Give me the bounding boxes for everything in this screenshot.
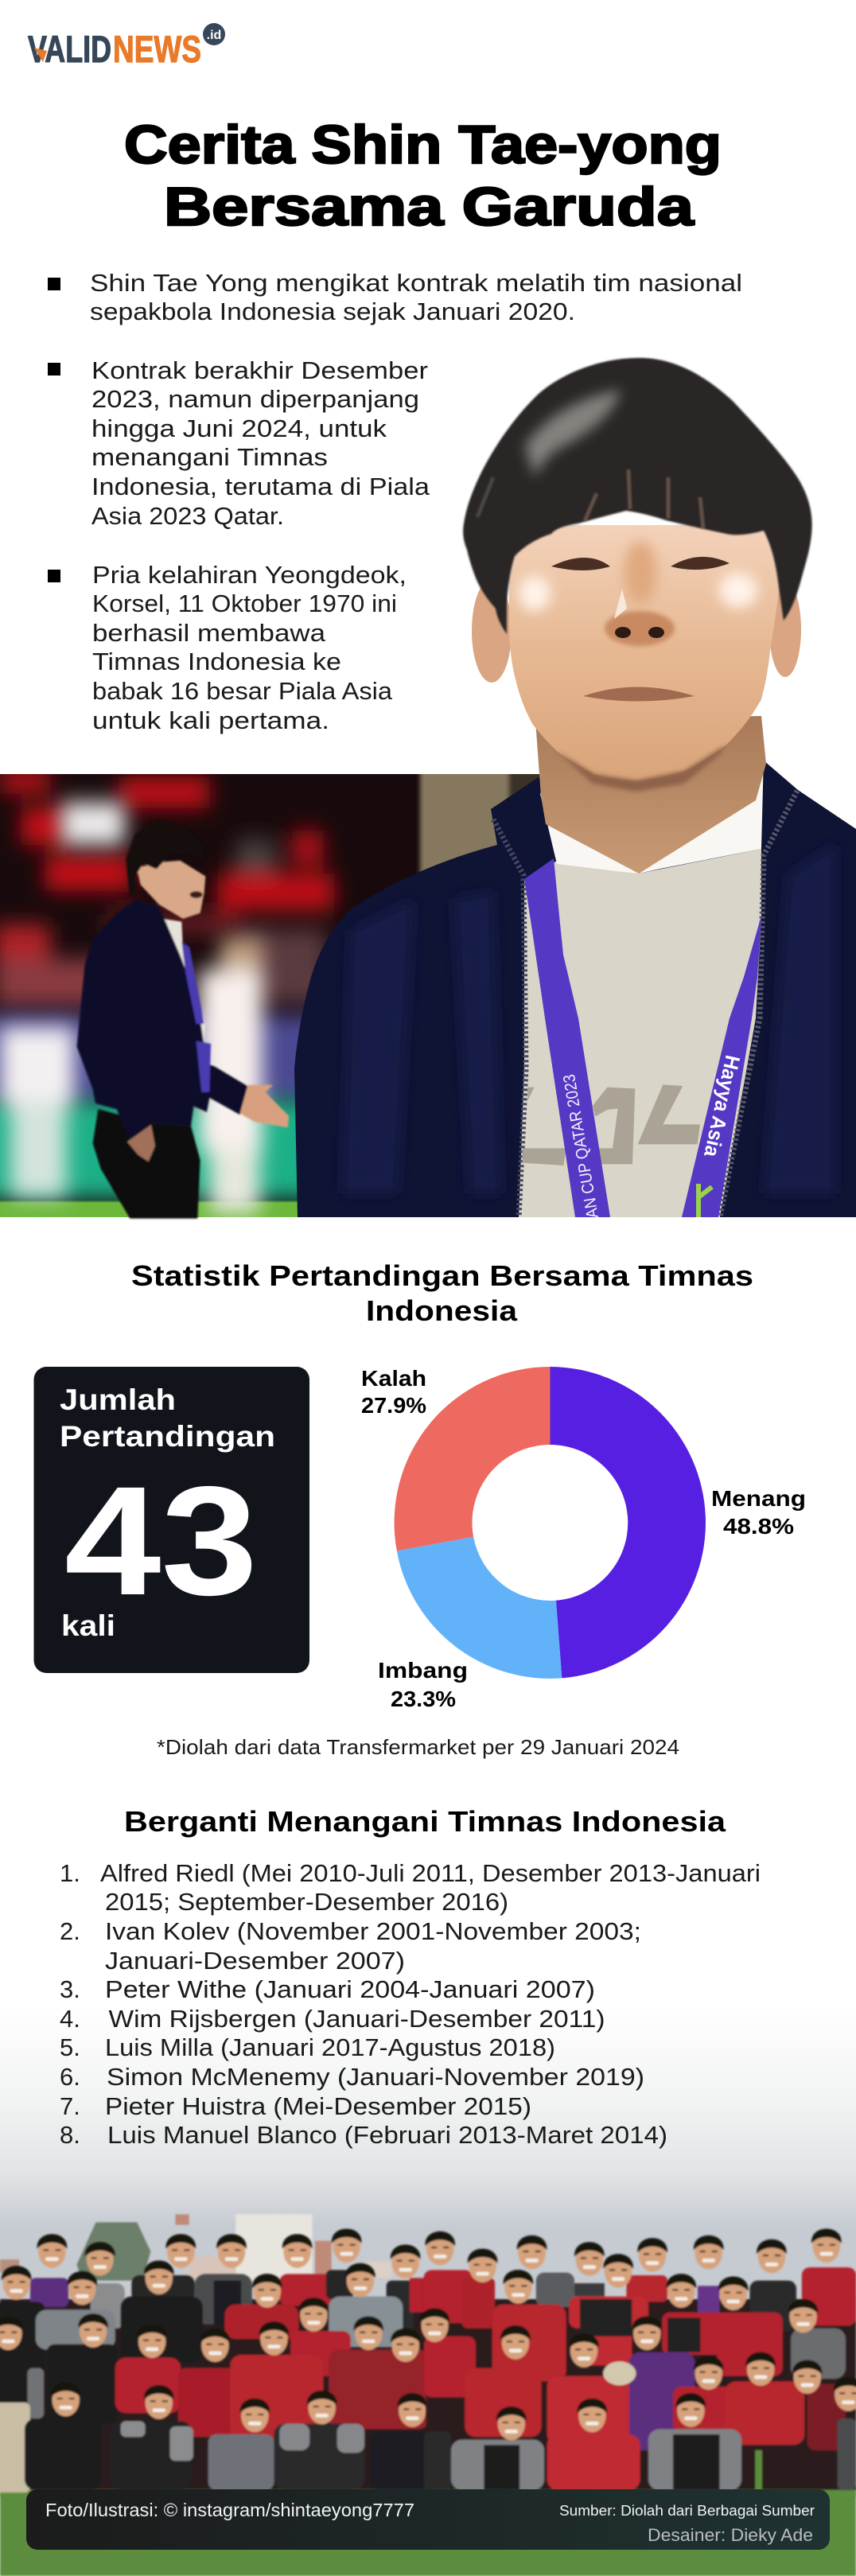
shirt emblem <box>523 1084 700 1165</box>
text block: third bullet <box>48 561 407 734</box>
shirt <box>163 919 205 1053</box>
heads <box>37 2234 67 2268</box>
numbered list of coaches: 2. <box>60 1917 80 1945</box>
label: imbang: 23.3% <box>391 1687 456 1711</box>
grass <box>0 2486 856 2576</box>
text block: third bullet: babak 16 besar Piala Asia <box>92 677 393 705</box>
footer credits bar: Sumber: Diolah dari Berbagai Sumber <box>559 2503 815 2519</box>
label: menang: 48.8% <box>723 1514 794 1539</box>
back row clothing <box>424 2270 473 2323</box>
numbered list of coaches: 8. <box>60 2121 80 2149</box>
shirt collar <box>540 756 764 874</box>
front row clothing <box>0 2403 30 2492</box>
jaw shadow <box>557 745 726 792</box>
text block: first bullet: Shin Tae Yong mengikat kontrak melatih tim nasional <box>90 269 742 297</box>
players right half <box>420 2228 856 2490</box>
label: menang <box>711 1486 806 1539</box>
numbered list of coaches: Luis Manuel Blanco (Februari 2013-Maret 2014) <box>107 2121 667 2149</box>
numbered list of coaches: 1. <box>60 1859 80 1887</box>
numbered list of coaches: Ivan Kolev (November 2001-November 2003; <box>105 1917 641 1945</box>
numbered list of coaches: Alfred Riedl (Mei 2010-Juli 2011, Desember 2013-Januari <box>100 1859 761 1887</box>
label: kalah: Kalah <box>361 1366 426 1391</box>
pocket hand <box>127 1125 155 1162</box>
heading: coach history: Berganti Menangani Timnas Indonesia <box>124 1805 726 1838</box>
text block: second bullet: menangani Timnas <box>91 443 328 471</box>
heads <box>425 2232 455 2265</box>
fringe strands <box>477 469 703 529</box>
numbered list of coaches: 2015; September-Desember 2016) <box>105 1888 508 1916</box>
segment: imbang <box>397 1537 562 1679</box>
panel: total matches card: 43 <box>64 1454 258 1628</box>
text block: second bullet: hingga Juni 2024, untuk <box>91 414 387 442</box>
back row clothing <box>30 2278 68 2307</box>
stadium background <box>0 2214 391 2283</box>
label: kalah: 27.9% <box>361 1393 426 1418</box>
text block: second bullet: Asia 2023 Qatar. <box>91 502 284 530</box>
heading: match statistics <box>131 1259 753 1327</box>
hair grey streak <box>525 390 621 477</box>
mouth <box>583 687 695 702</box>
sponsor mark <box>698 1184 712 1217</box>
lanyard text: Hayya Asia <box>699 1053 745 1160</box>
hair <box>463 358 812 634</box>
sky <box>0 2005 856 2228</box>
neck <box>535 716 766 874</box>
face <box>137 861 205 919</box>
text block: third bullet: Korsel, 11 Oktober 1970 ini <box>92 590 397 617</box>
jacket <box>294 761 856 1217</box>
segment: kalah <box>395 1367 551 1551</box>
text block: second bullet: 2023, namun diperpanjang <box>91 385 419 413</box>
numbered list of coaches: 6. <box>60 2063 80 2091</box>
nose <box>605 589 675 646</box>
numbered list of coaches: Simon McMenemy (Januari-November 2019) <box>107 2063 644 2091</box>
text block: third bullet: untuk kali pertama. <box>92 706 329 734</box>
logo: Validnews.id: VALID <box>28 28 111 70</box>
numbered list of coaches: Pieter Huistra (Mei-Desember 2015) <box>105 2092 531 2120</box>
lanyard and badge <box>181 941 204 1024</box>
logo: Validnews.id <box>28 23 225 70</box>
cheek highlights <box>519 541 757 611</box>
gloves <box>603 2361 636 2385</box>
lanyard left <box>524 858 610 1217</box>
bib players <box>569 2297 648 2329</box>
title: Bersama Garuda <box>164 177 695 237</box>
panel: total matches card <box>33 1367 309 1673</box>
numbered list of coaches: 4. <box>60 2005 80 2033</box>
hair <box>126 819 204 897</box>
hand <box>240 1085 289 1127</box>
text block: first bullet: sepakbola Indonesia sejak Januari 2020. <box>90 298 575 325</box>
title: Cerita Shin Tae-yong <box>124 115 722 175</box>
panel: total matches card: kali <box>61 1609 115 1642</box>
numbered list of coaches: Peter Withe (Januari 2004-Januari 2007) <box>105 1975 595 2003</box>
numbered list of coaches: 5. <box>60 2033 80 2061</box>
trousers <box>93 1109 200 1219</box>
numbered list of coaches: 7. <box>60 2092 80 2120</box>
sweater <box>519 849 761 1217</box>
numbered list of coaches: Januari-Desember 2007) <box>105 1947 405 1975</box>
footer credits bar: Foto/Ilustrasi: © instagram/shintaeyong7777 <box>45 2500 414 2520</box>
middle row clothing <box>424 2337 476 2397</box>
photo: stadium background with coach <box>0 768 555 1235</box>
logo: Validnews.id: .id <box>207 29 221 42</box>
jacket folds <box>342 843 835 1193</box>
donut chart <box>395 1367 706 1679</box>
zip right <box>720 791 797 1217</box>
heading: match statistics: Statistik Pertandingan Bersama Timnas <box>131 1259 753 1292</box>
text block: first bullet <box>48 269 742 325</box>
numbered list of coaches: Luis Milla (Januari 2017-Agustus 2018) <box>105 2033 555 2061</box>
text block: third bullet: Timnas Indonesia ke <box>92 648 341 675</box>
players left half <box>0 2228 430 2492</box>
logo: Validnews.id: NEWS <box>113 28 201 70</box>
badge <box>196 1041 211 1092</box>
text block: third bullet: Pria kelahiran Yeongdeok, <box>92 561 407 589</box>
panel: total matches card: Jumlah <box>60 1383 176 1416</box>
middle row clothing <box>0 2302 45 2429</box>
text block: second bullet: Indonesia, terutama di Piala <box>91 473 430 500</box>
segment: menang <box>551 1367 706 1678</box>
title <box>124 115 722 237</box>
heading: match statistics: Indonesia <box>366 1294 518 1327</box>
front row clothing <box>424 2432 451 2490</box>
footer credits bar: Desainer: Dieky Ade <box>648 2525 813 2545</box>
mouth <box>190 891 203 898</box>
numbered list of coaches: 3. <box>60 1975 80 2003</box>
numbered list of coaches: Wim Rijsbergen (Januari-Desember 2011) <box>108 2005 605 2033</box>
face <box>509 525 780 780</box>
label: imbang <box>378 1658 468 1711</box>
lanyard right <box>682 916 761 1217</box>
small coach figure <box>77 819 289 1219</box>
label: kalah <box>361 1366 426 1418</box>
jacket <box>77 901 248 1140</box>
text block: second bullet: Kontrak berakhir Desember <box>91 356 428 384</box>
numbered list of coaches <box>60 1859 761 2149</box>
label: menang: Menang <box>711 1486 806 1511</box>
lanyard text left: AN CUP QATAR 2023 <box>560 1073 602 1220</box>
panel: total matches card: Pertandingan <box>60 1420 275 1453</box>
zip left <box>493 819 526 1217</box>
text block: second bullet <box>48 356 430 530</box>
photo: Shin Tae-yong portrait <box>294 358 856 1220</box>
data note: *Diolah dari data Transfermarket per 29 Januari 2024 <box>157 1735 679 1759</box>
eyes <box>551 557 730 570</box>
footer credits bar <box>26 2489 830 2550</box>
text block: third bullet: berhasil membawa <box>92 619 326 647</box>
label: imbang: Imbang <box>378 1658 468 1683</box>
ears <box>472 579 801 683</box>
team photo <box>0 2005 856 2576</box>
